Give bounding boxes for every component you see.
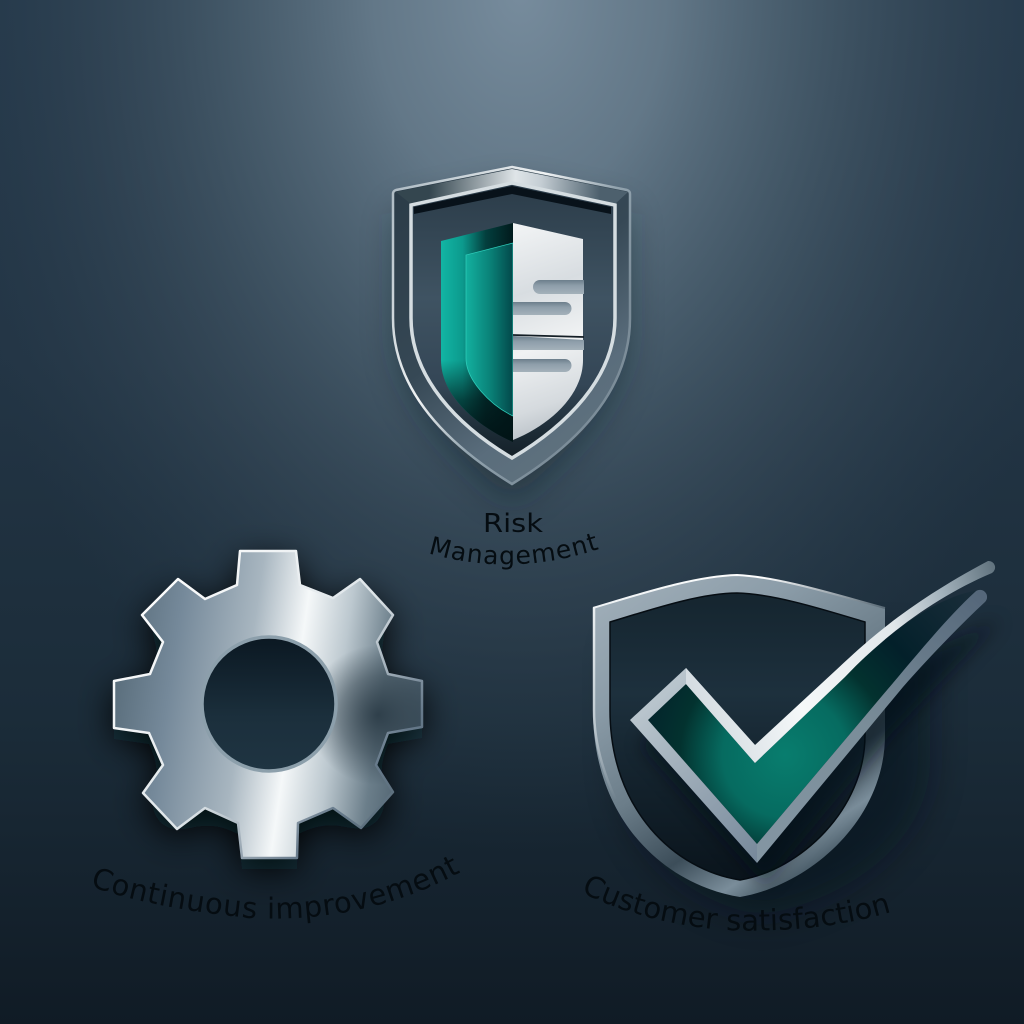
inner field [411, 183, 615, 458]
slot 4 [513, 359, 572, 372]
shield drop shadow [399, 190, 625, 500]
shield frame [593, 575, 885, 897]
outer metal frame [393, 167, 630, 484]
slot 2 [513, 302, 572, 315]
shield top rim highlight [593, 575, 885, 608]
label: customer satisfaction: Customer satisfaction [586, 876, 890, 931]
check lower right stroke [757, 590, 987, 863]
frame top highlight [396, 169, 628, 204]
shield left rim highlight [594, 608, 616, 800]
teal bottom fade [441, 360, 513, 442]
gear dark sheen [321, 651, 421, 777]
gear hole [202, 637, 336, 771]
teal half, outer [441, 223, 513, 442]
check teal fill [648, 590, 980, 844]
slot 1 [533, 280, 584, 294]
label: risk: Risk [483, 509, 543, 539]
icon: gear [114, 551, 430, 869]
label: management: Management [430, 534, 598, 570]
slot 3 [513, 336, 584, 350]
gear body [114, 551, 422, 858]
icon: risk management shield [393, 167, 630, 500]
inner top shadow band [414, 186, 611, 214]
label: continuous improvement: Continuous improvement [94, 857, 460, 924]
check upper bright stroke [686, 561, 995, 763]
gear edge [114, 551, 422, 858]
gear shadow [114, 562, 422, 869]
icon: shield with check mark [593, 561, 1000, 915]
shield inner field [610, 593, 865, 880]
shield shadow [620, 640, 930, 915]
teal half, inner [466, 243, 513, 416]
check left arm metal [630, 668, 757, 863]
check shadow [640, 620, 1000, 885]
white half [513, 223, 583, 440]
